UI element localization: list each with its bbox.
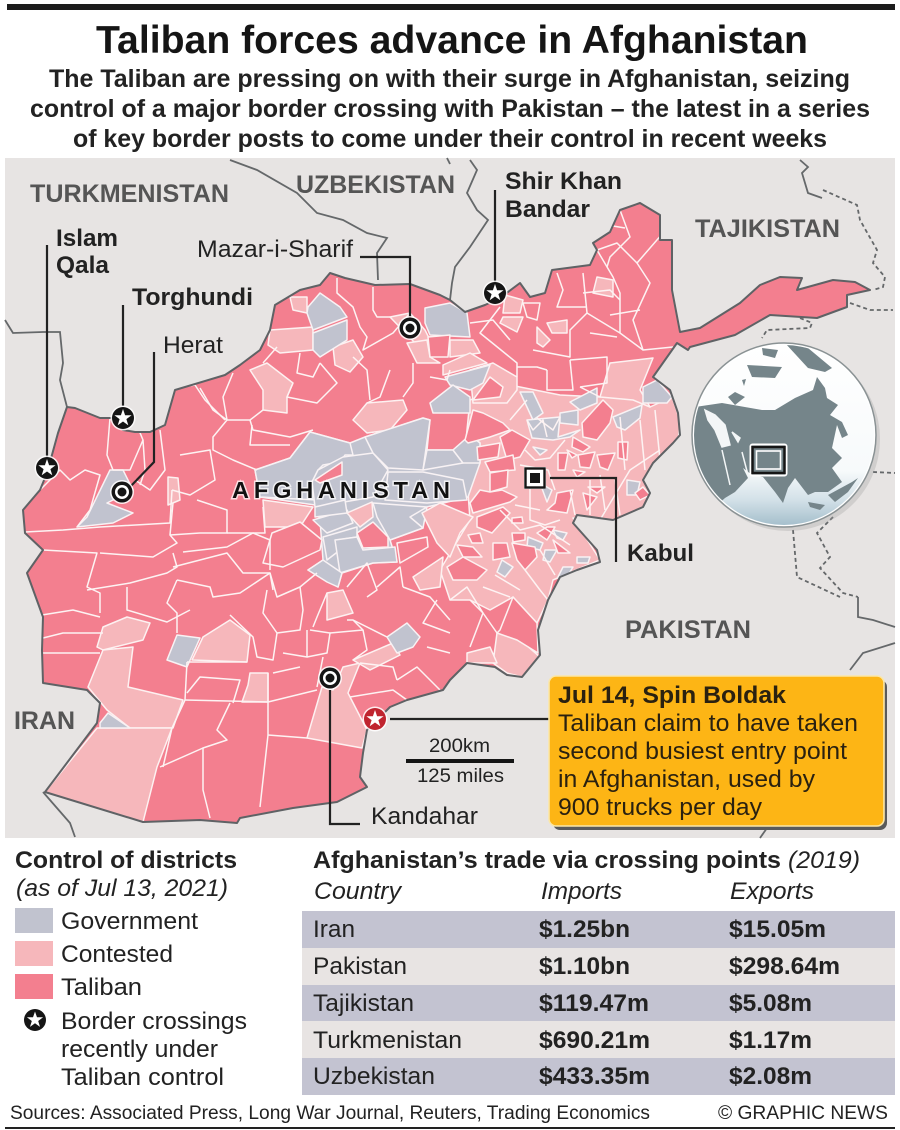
callout leader lines <box>47 190 616 824</box>
icon: border crossing Shir Khan Bandar <box>482 280 508 306</box>
row: Turkmenistan: $1.17m <box>729 1027 812 1054</box>
bottom rule <box>5 1127 895 1129</box>
row: Pakistan: Pakistan <box>313 953 407 980</box>
row: Iran <box>302 911 895 948</box>
row: Uzbekistan <box>302 1058 895 1095</box>
row: Uzbekistan: $433.35m <box>539 1063 650 1090</box>
row: Tajikistan: $5.08m <box>729 990 812 1017</box>
callout: Spin Boldak: second busiest entry point <box>558 738 847 765</box>
country labels: IRAN <box>14 708 75 735</box>
panel: legend <box>15 847 247 1091</box>
icon: border crossing Islam Qala <box>34 456 60 480</box>
icon: Mazar-i-Sharif city marker <box>398 316 422 340</box>
scale bar <box>406 736 514 787</box>
country labels: PAKISTAN <box>625 617 751 644</box>
country labels: TURKMENISTAN <box>30 181 229 208</box>
legend: border crossings: Taliban control <box>61 1064 224 1091</box>
globe locator <box>680 343 880 531</box>
subtitle <box>30 65 870 153</box>
callout: Spin Boldak: 900 trucks per day <box>558 794 763 821</box>
table heading: (2019) <box>788 847 860 874</box>
icon: Herat city marker <box>110 480 134 504</box>
disputed dashed borders <box>762 190 895 597</box>
base: Taliban districts <box>15 195 875 830</box>
icon: border crossing Torghundi <box>110 406 136 430</box>
row: Iran: $1.25bn <box>539 916 630 943</box>
scale bar: 125 miles <box>417 766 504 787</box>
row: Turkmenistan <box>302 1021 895 1058</box>
globe: inland seas <box>705 410 748 485</box>
legend heading: Control of districts <box>15 847 237 874</box>
row: Tajikistan: $119.47m <box>539 990 649 1017</box>
row: Pakistan <box>302 948 895 985</box>
legend heading <box>15 847 237 902</box>
country labels <box>14 172 840 735</box>
row: Uzbekistan: Uzbekistan <box>313 1063 435 1090</box>
row: Iran: $15.05m <box>729 916 826 943</box>
callout: Spin Boldak: Jul 14, Spin Boldak <box>558 682 786 709</box>
table heading: Afghanistan’s trade via crossing points <box>313 847 781 874</box>
icon: Kandahar city marker <box>318 666 342 690</box>
row: Iran: Iran <box>313 916 355 943</box>
globe: locator frame <box>750 444 786 476</box>
choropleth: Afghanistan districts <box>15 195 875 830</box>
row: Pakistan: $1.10bn <box>539 953 630 980</box>
legend: Taliban: Taliban <box>61 974 142 1001</box>
row: Pakistan: $298.64m <box>729 953 840 980</box>
subtitle: of key border posts to come under their control in recent weeks <box>73 125 827 153</box>
label: Torghundi: Torghundi <box>132 284 253 311</box>
title: Taliban forces advance in Afghanistan <box>96 19 808 62</box>
table column headers: Imports <box>541 878 622 905</box>
label: Mazar-i-Sharif: Mazar-i-Sharif <box>197 236 353 263</box>
Taliban patches <box>263 303 650 653</box>
country labels: TAJIKISTAN <box>695 216 840 243</box>
row: Tajikistan <box>302 985 895 1021</box>
legend: border crossings: Border crossings <box>61 1008 247 1035</box>
row: Turkmenistan: $690.21m <box>539 1027 650 1054</box>
label: Islam Qala: Islam <box>56 225 118 252</box>
legend: contested: Contested <box>61 941 173 968</box>
row: Turkmenistan: Turkmenistan <box>313 1027 462 1054</box>
icon: Spin Boldak crossing <box>362 706 388 732</box>
contested districts over the government block <box>347 502 473 557</box>
row: Tajikistan: Tajikistan <box>313 990 414 1017</box>
subtitle: control of a major border crossing with Pakistan – the latest in a series <box>30 95 870 123</box>
legend: border crossings: recently under <box>61 1036 218 1063</box>
credit: © GRAPHIC NEWS <box>718 1103 888 1124</box>
legend heading: (as of Jul 13, 2021) <box>16 875 228 902</box>
label: Kabul: Kabul <box>627 540 694 567</box>
contested districts <box>45 277 680 822</box>
label: Shir Khan Bandar: Shir Khan <box>505 168 622 195</box>
callout: Spin Boldak: in Afghanistan, used by <box>558 766 816 793</box>
country labels: UZBEKISTAN <box>296 172 455 199</box>
table column headers: Country <box>314 878 403 905</box>
callout: Spin Boldak: Taliban claim to have taken <box>558 710 858 737</box>
label: Islam Qala: Qala <box>56 252 109 279</box>
top rule <box>7 4 895 10</box>
Afghanistan outline <box>23 203 870 823</box>
neighbouring borders <box>5 158 895 838</box>
government districts <box>77 293 672 728</box>
label: AFGHANISTAN: AFGHANISTAN <box>232 477 450 503</box>
table column headers: Exports <box>730 878 814 905</box>
table column headers <box>314 878 814 905</box>
legend: border crossings <box>24 1008 247 1091</box>
scale bar: 200km <box>429 736 490 757</box>
label: Shir Khan Bandar: Bandar <box>505 196 590 223</box>
label: Shir Khan Bandar <box>505 168 622 223</box>
callout: Spin Boldak <box>549 676 887 830</box>
label: Kandahar: Kandahar <box>371 803 478 830</box>
icon: Kabul capital marker <box>524 467 546 489</box>
panel: map <box>5 158 895 838</box>
legend: Taliban <box>15 974 142 1001</box>
district boundaries <box>25 210 673 818</box>
label: Islam Qala <box>56 225 118 279</box>
subtitle: The Taliban are pressing on with their surge in Afghanistan, seizing <box>49 65 850 93</box>
sources: Sources: Associated Press, Long War Journal, Reuters, Trading Economics <box>10 1103 650 1124</box>
row: Uzbekistan: $2.08m <box>729 1063 812 1090</box>
label: Herat: Herat <box>163 332 223 359</box>
panel: trade table <box>302 847 895 1095</box>
legend: government: Government <box>61 908 198 935</box>
